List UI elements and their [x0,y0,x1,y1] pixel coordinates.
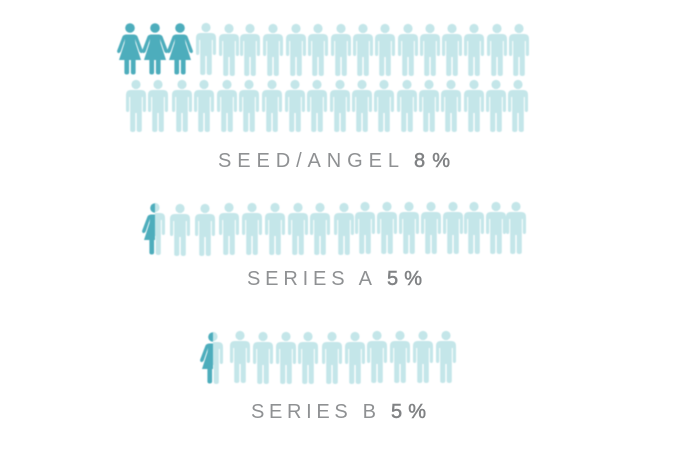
icon: half woman half man [200,332,226,384]
icons: men series A [170,202,526,256]
label: seed/angel 8%: 8% [414,150,450,172]
pictogram: seed/angel row 1 [117,23,529,76]
icon: half woman half man [142,203,168,255]
label: series A 5%: SERIES A [247,268,373,290]
pictogram: series B [200,331,456,384]
pictogram: seed/angel row 2 [126,80,528,132]
label: series B 5%: SERIES B [251,401,376,423]
label: seed/angel 8%: SEED/ANGEL [218,150,399,172]
icons: men series B [230,331,456,384]
label: series A 5%: 5% [387,268,422,290]
icon: women highlighted [117,23,193,74]
pictogram: series A [142,202,526,256]
label: series B 5%: 5% [391,401,426,423]
icons: men row 1 [196,23,529,76]
